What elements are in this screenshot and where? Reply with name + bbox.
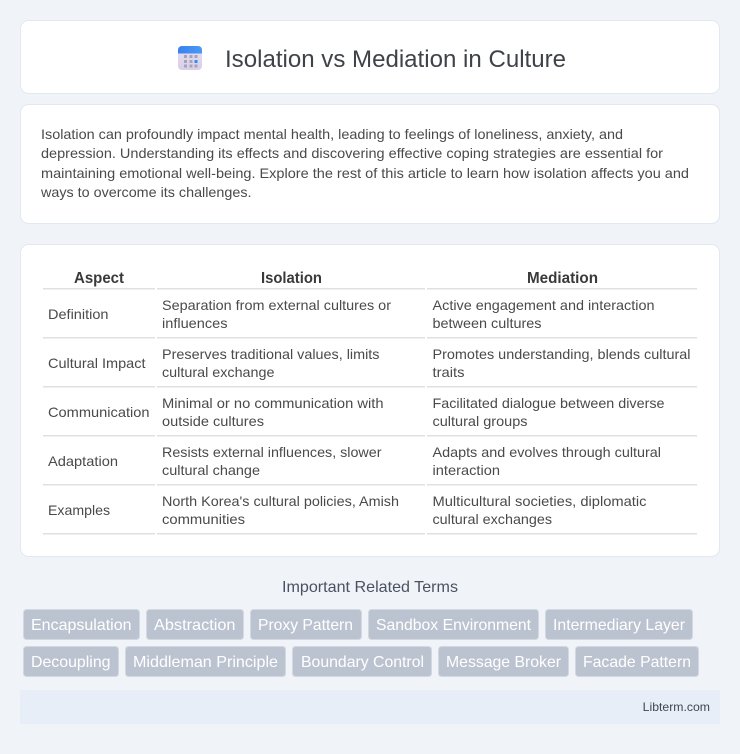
tag: Middleman Principle [126, 646, 286, 676]
tag: Sandbox Environment: Sandbox Environment [376, 617, 532, 634]
table header row: Isolation [261, 270, 322, 287]
heading: related terms: Important Related Terms [282, 579, 458, 596]
tag: Proxy Pattern: Proxy Pattern [258, 617, 353, 634]
table header row: Aspect [74, 270, 125, 287]
table row: Communication [48, 395, 665, 429]
panel: related term tags [24, 610, 698, 676]
table row: Communication: Minimal or no communication with [162, 395, 384, 411]
panel: introduction [20, 104, 720, 224]
tag: Abstraction: Abstraction [154, 617, 236, 634]
table row: Communication: cultural groups [432, 413, 528, 429]
tag: Decoupling: Decoupling [31, 654, 110, 671]
table row: Examples: cultural exchanges [432, 511, 552, 527]
table row: Examples: Examples [48, 502, 110, 518]
tag: Proxy Pattern [250, 610, 362, 640]
tag: Middleman Principle: Middleman Principle [133, 654, 278, 671]
table row: Examples: communities [162, 511, 245, 527]
table row: Definition: Definition [48, 306, 108, 322]
tag: Sandbox Environment [368, 610, 538, 640]
table row: Definition: Separation from external cultures or [162, 297, 391, 313]
panel: comparison table [20, 244, 720, 556]
text block: intro paragraph [40, 126, 689, 200]
table row: Communication: outside cultures [162, 413, 264, 429]
tag: Message Broker [438, 646, 568, 676]
table row: Cultural Impact: Promotes understanding, blends cultural [432, 346, 690, 362]
text block: intro paragraph: maintaining emotional well-being. Explore the rest of this article to learn how isolation affects you and [41, 165, 689, 181]
table row: Communication: Communication [48, 404, 150, 420]
table row: Adaptation: Adapts and evolves through cultural [432, 444, 661, 460]
icon: calendar [178, 46, 202, 70]
table row: Adaptation [48, 444, 661, 478]
table row: Definition: Active engagement and interaction [432, 297, 654, 313]
tag: Intermediary Layer: Intermediary Layer [553, 617, 686, 634]
table row: Cultural Impact: cultural exchange [162, 364, 275, 380]
table row: Adaptation: Adaptation [48, 453, 118, 469]
table header row [74, 270, 598, 287]
tag: Message Broker: Message Broker [446, 654, 562, 671]
tag: Facade Pattern [576, 646, 698, 676]
table row: Cultural Impact: Cultural Impact [48, 355, 146, 371]
table row: Examples: North Korea's cultural policies, Amish [162, 493, 399, 509]
table row: Cultural Impact [48, 346, 690, 380]
table row: Definition: between cultures [432, 315, 542, 331]
tag: Encapsulation [24, 610, 140, 640]
footer [20, 690, 720, 724]
table row: Cultural Impact: Preserves traditional values, limits [162, 346, 380, 362]
table row: Definition [48, 297, 654, 331]
tag: Abstraction [146, 610, 244, 640]
footer source text: Libterm.com [643, 700, 710, 714]
text block: intro paragraph: depression. Understanding its effects and discovering effective coping strategies are essential for [41, 145, 663, 161]
text block: intro paragraph: Isolation can profoundly impact mental health, leading to feelings of loneliness, anxiety, and [41, 126, 623, 142]
table row: Adaptation: Resists external influences, slower [162, 444, 382, 460]
panel: header [20, 20, 720, 94]
table row: Examples [48, 493, 646, 527]
tag: Intermediary Layer [546, 610, 692, 640]
tag: Decoupling [24, 646, 118, 676]
tag: Facade Pattern: Facade Pattern [583, 654, 691, 671]
title: Isolation vs Mediation in Culture [225, 46, 566, 73]
table row: Adaptation: interaction [432, 462, 500, 478]
table row: Cultural Impact: traits [432, 364, 464, 380]
table header row: Mediation [527, 270, 598, 287]
table row: Definition: influences [162, 315, 228, 331]
tag: Boundary Control [292, 646, 432, 676]
tag: Encapsulation: Encapsulation [31, 617, 132, 634]
table row: Adaptation: cultural change [162, 462, 260, 478]
tag: Boundary Control: Boundary Control [301, 654, 424, 671]
table row: Communication: Facilitated dialogue between diverse [432, 395, 665, 411]
table row: Examples: Multicultural societies, diplomatic [432, 493, 646, 509]
text block: intro paragraph: ways to overcome its challenges. [40, 184, 252, 200]
